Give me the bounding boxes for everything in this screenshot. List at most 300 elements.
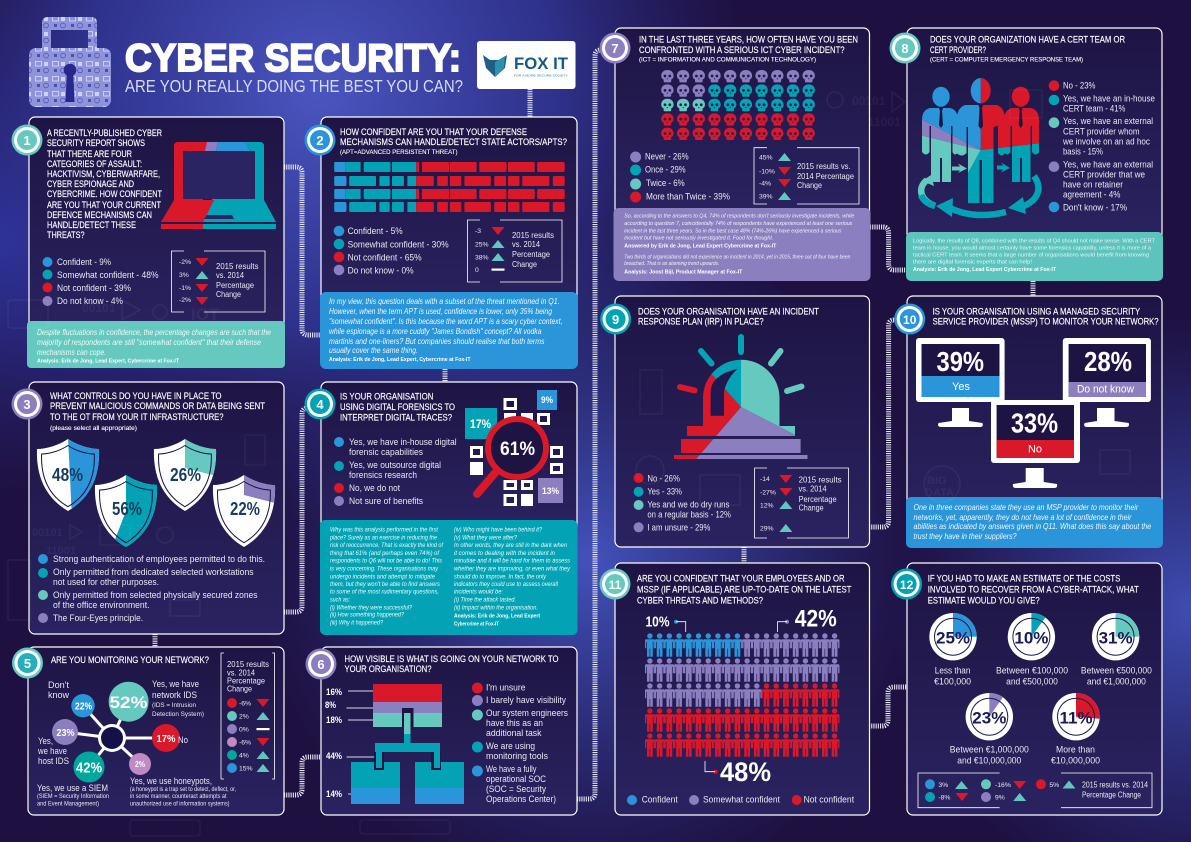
panel 5 card <box>28 647 284 815</box>
panel 4: digital forensics <box>304 382 578 635</box>
panel 5 labels: (SIEM = Security Information <box>37 793 109 800</box>
arrows around the team <box>921 176 1038 215</box>
panel 2: state actors / APTs <box>304 117 578 369</box>
badge 11 <box>600 568 630 600</box>
panel 6 legend: I'm unsure <box>486 682 526 692</box>
panel 9 change box: 2015 results <box>799 476 842 485</box>
panel 7 change box: 45% <box>759 154 773 162</box>
panel 6 legend: Operations Center) <box>486 794 556 804</box>
panel 4 legend <box>334 437 457 506</box>
badge 8 <box>890 32 920 64</box>
callout: 42%: 42% <box>795 606 837 633</box>
panel 6 legend: operational SOC <box>486 774 546 784</box>
panel 9 card <box>615 296 870 547</box>
background technology motifs: 00101 <box>32 527 63 539</box>
panel 11 heading <box>637 574 852 606</box>
panel 4 analysis box <box>320 520 578 635</box>
panel 5 labels: (IDS = Intrusion <box>152 702 196 709</box>
panel 8 legend: basis - 15% <box>1063 146 1103 156</box>
monitor: No 33%: 33% <box>1011 407 1058 438</box>
panel 2 analysis box: usually cover the same thing. <box>329 346 418 355</box>
chart: network hierarchy: 18% <box>326 715 342 725</box>
donut 25%: 25% <box>936 628 970 647</box>
panel 5 change box: Percentage <box>227 676 266 686</box>
panel 2 change box <box>468 220 562 282</box>
panel 12 card <box>907 563 1162 815</box>
badge 10: 10 <box>903 313 917 327</box>
panel 1 heading: DEFENCE MECHANISMS CAN <box>47 210 152 220</box>
panel 8 legend: agreement - 4% <box>1063 190 1120 200</box>
chart: network hierarchy: 16% <box>326 687 342 697</box>
panel 11 heading: CYBER THREATS AND METHODS? <box>637 596 763 606</box>
panel 8 card <box>907 28 1162 240</box>
panel 9 change box: -14 <box>760 476 770 483</box>
panel 6 legend: I barely have visibility <box>486 695 566 705</box>
badge 7 <box>600 32 630 64</box>
panel 4 legend: forensic capabilities <box>349 447 423 457</box>
panel 4 analysis box: such as: <box>330 597 350 604</box>
badge 4 <box>304 388 336 420</box>
panel 9 heading: DOES YOUR ORGANISATION HAVE AN INCIDENT <box>638 306 819 316</box>
panel 5 change box: 0% <box>239 726 249 734</box>
donut labels: €100,000 <box>934 677 971 687</box>
chart: network hierarchy: 14% <box>326 789 342 799</box>
panel 3 legend: not used for other purposes. <box>53 577 159 587</box>
panel 4 analysis box: Why was this analysis performed in the first <box>330 527 438 534</box>
badge 3 <box>12 388 42 420</box>
badge 4: 4 <box>316 397 324 412</box>
panel 4 analysis box: undergo incidents and attempt to mitigate <box>330 573 435 580</box>
panel 8 analysis box: tactical CERT team. It seems that a large number of organisations would benefit from knowing <box>913 252 1149 258</box>
panel 11 legend: Not confident <box>804 795 855 805</box>
panel 12 change box: 5% <box>1049 782 1059 789</box>
panel 2 analysis box: However, when the term APT is used, confidence is lower, only 35% being <box>329 307 552 316</box>
chart: network hierarchy <box>325 684 464 804</box>
panel 1 legend: Not confident - 39% <box>57 282 131 293</box>
monitor: No 33% <box>991 400 1080 488</box>
panel 7 analysis box <box>614 208 870 281</box>
panel 1 analysis box: Analysis: Erik de Jong, Lead Expert, Cybercrime at Fox-IT <box>37 358 180 364</box>
panel 9: incident response plan <box>600 296 870 547</box>
panel 2 change box: 2015 results <box>512 231 554 240</box>
background technology motifs: 00101 <box>82 301 116 315</box>
panel 5 labels: Yes, we use a SIEM <box>37 783 108 793</box>
panel 4 analysis box: (i) Whether they were successful? <box>330 604 412 611</box>
panel 4 analysis box: risk of reoccurrence. That is exactly the kind of <box>330 542 444 549</box>
monitor: No 33%: No <box>1028 444 1042 456</box>
panel 5 labels: we have <box>37 746 67 756</box>
panel 8 analysis box: there are digital forensic experts that can help! <box>913 260 1032 266</box>
icon: shield 48%: 48% <box>52 465 83 485</box>
panel 1 heading: ARE YOU THAT YOUR CURRENT <box>47 200 161 210</box>
icon: padlock made of small technology icons <box>29 17 111 107</box>
panel 4 analysis box: (i) Time the attack lasted. <box>454 597 516 604</box>
panel 10 analysis box: One in three companies state they use an MSP provider to monitor their <box>914 503 1138 512</box>
monitor: Do not know 28%: Do not know <box>1077 384 1134 396</box>
panel 12 change box: Percentage Change <box>1082 791 1141 800</box>
panel 4 legend: Yes, we have in-house digital <box>349 437 457 447</box>
icon: shield 26%: 26% <box>170 465 201 485</box>
panel 7 analysis box: Answered by Erik de Jong, Lead Expert Cybercrime at Fox-IT <box>624 243 777 249</box>
donut 31% <box>1092 613 1139 660</box>
panel 4 analysis box: (iv) Who might have been behind it? <box>454 527 542 534</box>
diagram: hub with spokes: 23% <box>56 728 75 739</box>
icon: laptop pie <box>161 142 276 229</box>
panel 5 labels: in some manner, counteract attempts at <box>130 793 227 800</box>
panel 1 change box: -2% <box>179 297 191 304</box>
panel 9 heading <box>638 306 819 326</box>
chart: fingerprint blocks with magnifier 61%: 17% <box>470 417 491 431</box>
panel 2 change box: Percentage <box>512 250 551 259</box>
panel 7 heading: CONFRONTED WITH A SERIOUS ICT CYBER INCIDENT? <box>639 45 845 55</box>
panel 10 heading: IS YOUR ORGANISATION USING A MANAGED SECURITY <box>933 306 1140 316</box>
panel 10 analysis box: abilities as indicated by answers given in Q11. What does this say about the <box>914 522 1152 531</box>
panel 1 legend <box>42 256 158 306</box>
panel 7 analysis box: Two thirds of organisations did not experience an incident in 2014, yet in 2015, three out of four have been <box>624 254 850 260</box>
panel 5 labels: know <box>48 690 70 700</box>
panel 8 legend: we involve on an ad hoc <box>1062 137 1150 147</box>
panel 2 change box: 25% <box>475 242 489 248</box>
panel 2 heading: (APT=ADVANCED PERSISTENT THREAT) <box>340 149 458 156</box>
panel 10 analysis box: trust they have in their suppliers? <box>914 532 1017 541</box>
background technology motifs: 11001 <box>868 115 901 129</box>
badge 2 <box>304 124 336 156</box>
panel 7 legend: Twice - 6% <box>646 177 685 188</box>
panel 7 change box: -4% <box>759 180 771 188</box>
chart: fingerprint blocks with magnifier 61%: 13% <box>542 486 559 497</box>
panel 7 heading <box>639 35 858 64</box>
panel 9 change box: 12% <box>760 502 774 510</box>
panel 8 heading: DOES YOUR ORGANIZATION HAVE A CERT TEAM OR <box>930 35 1125 45</box>
monitor: Yes 39%: 39% <box>936 346 984 377</box>
panel 8 legend: Yes, we have an in-house <box>1063 94 1155 104</box>
panel 1 change box: Change <box>216 290 241 299</box>
panel 2 heading: HOW CONFIDENT ARE YOU THAT YOUR DEFENSE <box>340 127 527 137</box>
panel 6 legend: Our system engineers <box>486 708 568 718</box>
donut 10% <box>1008 613 1055 660</box>
panel 6 legend: monitoring tools <box>486 751 548 761</box>
panel 8 legend: CERT team - 41% <box>1063 104 1125 114</box>
panel 3 legend <box>38 554 265 623</box>
panel 4 card <box>321 382 577 532</box>
panel 9 legend <box>634 473 731 533</box>
panel 2 legend: Confident - 5% <box>348 225 403 236</box>
panel 9 legend: Yes and we do dry runs <box>647 500 730 510</box>
panel 9 change box <box>755 468 848 538</box>
panel 6 heading: HOW VISIBLE IS WHAT IS GOING ON YOUR NETWORK TO <box>344 654 558 664</box>
chart: alarm light <box>674 334 808 459</box>
panel 9 change box: Change <box>799 504 824 513</box>
callout: 48%: 48% <box>720 757 771 787</box>
panel 8 legend: CERT provider whom <box>1063 127 1140 137</box>
panel 1 change box: 3% <box>179 272 189 279</box>
panel 7: serious incidents <box>600 28 870 281</box>
chart: skulls <box>661 70 815 140</box>
background technology motifs: 11001 <box>46 545 76 557</box>
diagram: hub with spokes <box>52 682 180 782</box>
callout: 10% <box>646 614 686 632</box>
panel 9 change box: Percentage <box>799 495 837 504</box>
panel 5 change box <box>221 653 274 779</box>
panel 1 heading: SECURITY REPORT SHOWS <box>47 138 145 148</box>
panel 6 heading <box>344 654 558 674</box>
panel 7 change box: -10% <box>759 168 775 176</box>
panel 7 legend <box>630 150 730 202</box>
panel 2 heading <box>340 127 567 156</box>
panel 4 analysis box: whether they are improving, or even what they <box>454 565 571 572</box>
panel 1 heading <box>47 128 162 240</box>
panel 6 legend: (SOC = Security <box>486 784 546 794</box>
panel 3 legend: Strong authentication of employees permitted to do this. <box>53 554 265 564</box>
panel 5 change box: 2015 results <box>227 660 269 669</box>
panel 7 analysis box: incident but have not seriously investigated it. Food for thought. <box>624 235 773 241</box>
panel 3 legend: Only permitted from selected physically secured zones <box>53 590 258 600</box>
panel 2 legend: Somewhat confident - 30% <box>348 238 449 250</box>
panel 9 heading: RESPONSE PLAN (IRP) IN PLACE? <box>638 316 764 326</box>
panel 8: CERT team <box>890 28 1163 281</box>
panel 5 change box: -6% <box>239 740 251 746</box>
icon: shield 26% <box>154 439 216 511</box>
panel 2 analysis box: "somewhat confident". Is this because the word APT is a scary cyber context, <box>329 317 562 326</box>
panel 7 heading: (ICT = INFORMATION AND COMMUNICATION TECHNOLOGY) <box>639 57 816 64</box>
panel 4 analysis box: (ii) Impact within the organisation. <box>454 604 538 611</box>
icon: shield 56%: 56% <box>112 499 142 519</box>
panel 4 analysis box: In other words, they are still in the dark when <box>454 542 567 549</box>
badge 1: 1 <box>23 133 31 148</box>
panel 8 legend: have on retainer <box>1063 180 1123 190</box>
panel 5 labels: host IDS <box>38 756 69 766</box>
panel 3 heading: TO THE OT FROM YOUR IT INFRASTRUCTURE? <box>50 412 224 422</box>
panel 7 analysis box: incident in the last three years. So in the best case 48% (74%-26%) have experienced a serious <box>624 228 841 234</box>
panel 8 legend: Yes, we have an external <box>1063 116 1153 126</box>
badge 7: 7 <box>611 41 619 56</box>
panel 6 heading: YOUR ORGANISATION? <box>344 664 432 674</box>
panel 5 labels: unauthorized use of information systems) <box>130 800 230 808</box>
panel 4 analysis box: thing that 61% (and perhaps even 74%) of <box>330 550 440 557</box>
logo: Fox-IT: FOX IT <box>514 55 568 73</box>
badge 6: 6 <box>317 657 325 672</box>
panel 1 legend: Do not know - 4% <box>57 295 123 306</box>
panel 3 heading: (please select all appropriate) <box>50 425 137 432</box>
panel 1 card <box>29 117 284 343</box>
panel 1 legend: Confident - 9% <box>57 256 111 267</box>
panel 1 heading: THREATS? <box>47 230 84 240</box>
panel 1 heading: CYBER ESPIONAGE AND <box>47 179 134 189</box>
panel 4 analysis box: (iii) Why it happened? <box>330 620 383 627</box>
donut labels: Between €100,000 <box>996 666 1068 676</box>
panel 8 heading: CERT PROVIDER? <box>930 45 986 55</box>
panel 12 change box: -8% <box>938 794 950 802</box>
panel 2 change box: vs. 2014 <box>512 240 541 249</box>
panel 5 labels: network IDS <box>152 690 197 700</box>
panel 4 analysis box: them, but they won't be able to find answers <box>330 581 441 588</box>
panel 1 heading: A RECENTLY-PUBLISHED CYBER <box>47 128 162 138</box>
panel 3 heading: WHAT CONTROLS DO YOU HAVE IN PLACE TO <box>50 391 222 401</box>
panel 6 legend <box>472 682 568 804</box>
panel 6 legend: have this as an <box>486 718 543 728</box>
donut 11% <box>1052 693 1100 740</box>
panel 1 change box: 2015 results <box>216 262 258 271</box>
panel 2 analysis box: while espionage is a more cuddly "James Bondish" concept? All vodka <box>329 327 542 336</box>
icon: shield 56% <box>94 475 158 547</box>
badge 12: 12 <box>900 578 914 592</box>
panel 2 change box: 38% <box>475 254 489 262</box>
panel 5 labels: and Event Management) <box>37 800 99 808</box>
badge 9: 9 <box>612 312 619 327</box>
panel 3 legend: The Four-Eyes principle. <box>53 613 143 623</box>
panel 12 heading <box>928 574 1139 606</box>
panel 8 analysis box: Logically, the results of Q8, combined with the results of Q4 should not make sense. With a CERT <box>913 238 1156 244</box>
panel 9 legend: on a regular basis - 12% <box>647 510 731 520</box>
panel 1: four categories of assault <box>12 117 285 368</box>
panel 5 change box: 15% <box>239 766 253 772</box>
badge 12 <box>891 568 922 600</box>
panel 4 analysis box: is very concerning. These organisations may <box>330 565 439 572</box>
panel 4 heading: USING DIGITAL FORENSICS TO <box>340 402 455 412</box>
panel 5 labels <box>37 679 236 808</box>
panel 2 analysis box: Analysis: Erik de Jong, Lead Expert, Cybercrime at Fox-IT <box>329 357 471 363</box>
chart: brick wall <box>334 162 565 212</box>
panel 11 legend <box>627 795 855 805</box>
panel 1 analysis box: Despite fluctuations in confidence, the percentage changes are such that the <box>37 328 271 337</box>
panel 2 change box: Change <box>512 260 537 269</box>
background technology motifs: BIG <box>927 475 947 487</box>
panel 1 analysis box: mechanisms can cope. <box>37 348 106 357</box>
panel 1 heading: CATEGORIES OF ASSAULT: <box>47 159 142 169</box>
panel 12 change box: 3% <box>938 782 948 789</box>
panel 5 labels: Yes, we use honeypots, <box>130 776 212 786</box>
donut labels <box>934 666 1152 766</box>
panel 5: monitoring network <box>12 647 284 815</box>
panel 1 legend: Somewhat confident - 48% <box>57 269 158 280</box>
panel 4 analysis box: Cybercrime at Fox-IT <box>454 622 499 628</box>
badge 2: 2 <box>316 133 324 148</box>
panel 3 heading <box>50 391 265 432</box>
chart: fingerprint blocks with magnifier 61%: 61% <box>500 439 535 460</box>
title: CYBER SECURITY: <box>125 37 461 80</box>
panel 5 heading: ARE YOU MONITORING YOUR NETWORK? <box>51 655 209 665</box>
panel 8 analysis box: Analysis: Erik de Jong, Lead Expert Cybercrime at Fox-IT <box>913 267 1057 273</box>
badge 3: 3 <box>23 397 31 412</box>
panel 5 labels: Yes, we have <box>152 679 199 689</box>
chart: three people pie <box>918 78 1042 218</box>
panel 3 legend: of the office environment. <box>53 600 150 610</box>
donut labels: Between €500,000 <box>1081 666 1152 676</box>
panel 5 change box: Change <box>227 684 252 694</box>
donut labels: Between €1,000,000 <box>950 745 1029 755</box>
panel 8 analysis box <box>906 232 1163 281</box>
panel 10 heading <box>933 306 1159 326</box>
panel 7 heading: IN THE LAST THREE YEARS, HOW OFTEN HAVE YOU BEEN <box>639 35 858 45</box>
panel 11: up-to-date confidence <box>600 563 870 815</box>
diagram: hub with spokes: 42% <box>76 760 102 776</box>
panel 7 card <box>615 28 870 218</box>
diagram: hub with spokes: 17% <box>156 733 176 745</box>
panel 2 heading: MECHANISMS CAN HANDLE/DETECT STATE ACTORS/APTS? <box>340 137 567 147</box>
panel 5 change box: 2% <box>239 714 249 720</box>
panel 5 change box: vs. 2014 <box>227 668 256 678</box>
donut 31%: 31% <box>1099 628 1133 647</box>
panel 8 heading <box>930 35 1125 64</box>
panel 4 analysis box: (v) What they were after? <box>454 534 517 541</box>
panel 4 analysis box: should do to improve. In fact, the only <box>454 573 547 580</box>
logo: Fox-IT <box>477 41 576 89</box>
panel 7 change box: 2014 Percentage <box>797 172 855 181</box>
panel 1 analysis box: majority of respondents are still "somewhat confident" that their defense <box>37 338 261 347</box>
panel 8 analysis box: team in house, you would almost certainly have some forensics capability, unless it is more of a <box>913 246 1152 252</box>
panel 9 change box: vs. 2014 <box>799 485 827 494</box>
badge 11: 11 <box>609 578 622 592</box>
panel 12 change box: -16% <box>995 782 1011 789</box>
panel 9 change box: 29% <box>760 526 774 532</box>
badge 8: 8 <box>901 41 909 56</box>
panel 2 analysis box: In my view, this question deals with a subset of the threat mentioned in Q1. <box>329 297 560 306</box>
panel 1 change box: -2% <box>179 259 191 266</box>
background technology motifs: 00101 <box>852 94 886 108</box>
logo: Fox-IT: FOR A MORE SECURE SOCIETY <box>514 74 568 78</box>
badge 1 <box>12 124 42 156</box>
panel 4 analysis box: to some of the most rudimentary questions, <box>330 589 439 596</box>
panel 5 labels: Detection System) <box>152 711 204 718</box>
panel 2 change box: 0 <box>475 267 479 274</box>
panel 7 legend: More than Twice - 39% <box>646 190 730 202</box>
chart: network hierarchy: 44% <box>326 751 342 761</box>
panel 11 heading: MSSP (IF APPLICABLE) ARE UP-TO-DATE ON THE LATEST <box>637 585 852 595</box>
icon: shield 22% <box>212 475 276 547</box>
connectors between panels <box>155 50 1033 799</box>
panel 2 analysis box: martinis and one-liners? But companies should realise that both terms <box>329 337 544 346</box>
panel 7 analysis box: Analysis: Joost Bijl, Product Manager at Fox-IT <box>624 269 743 275</box>
panel 10 analysis box <box>906 497 1163 548</box>
panel 4 analysis box: indicators they could use to assess overall <box>454 581 558 588</box>
badge 5: 5 <box>24 656 31 671</box>
monitor: Do not know 28% <box>1063 338 1151 427</box>
panel 11 legend: Somewhat confident <box>703 795 780 805</box>
panel 4 heading <box>340 392 455 423</box>
panel 9 change box: -27% <box>760 490 776 496</box>
panel 5 labels: (a honeypot is a trap set to detect, deflect, or, <box>130 786 236 793</box>
panel 12 change box <box>918 773 1152 808</box>
monitor: Yes 39%: Yes <box>952 381 970 393</box>
panel 7 legend: Once - 29% <box>645 164 686 174</box>
donut 23% <box>966 693 1013 740</box>
panel 11 card <box>615 563 870 815</box>
donut labels: and €500,000 <box>1006 677 1058 687</box>
panel 10 card <box>907 296 1162 521</box>
callout: 42% <box>778 606 837 633</box>
panel 6 card <box>321 647 577 815</box>
panel 3: controls <box>12 382 284 634</box>
donut labels: Less than <box>935 666 970 676</box>
panel 1 heading: THAT THERE ARE FOUR <box>47 149 132 159</box>
panel 4 analysis box: it comes to dealing with the incident in <box>454 550 555 557</box>
donut labels: and €1,000,000 <box>1087 677 1146 687</box>
panel 7 analysis box: breached. That is an alarming trend upwards. <box>624 261 719 267</box>
panel 7 change box: 39% <box>759 194 773 200</box>
subtitle: ARE YOU REALLY DOING THE BEST YOU CAN? <box>125 76 463 96</box>
panel 10: MSSP <box>894 296 1163 548</box>
panel 8 heading: (CERT = COMPUTER EMERGENCY RESPONSE TEAM) <box>930 57 1083 64</box>
panel 7 analysis box: So, according to the answers to Q4, 74% of respondents don't seriously investigate incidents, while <box>624 214 854 220</box>
panel 4 legend: forensics research <box>349 470 417 480</box>
panel 11 legend: Confident <box>642 795 678 805</box>
panel 2 card <box>321 117 577 317</box>
panel 8 legend: Don't know - 17% <box>1063 203 1127 213</box>
panel 12 change box: 9% <box>995 794 1005 802</box>
panel 2 analysis box <box>320 292 578 369</box>
icon: shield 22%: 22% <box>230 499 260 519</box>
panel 7 change box: 2015 results vs. <box>797 162 851 171</box>
